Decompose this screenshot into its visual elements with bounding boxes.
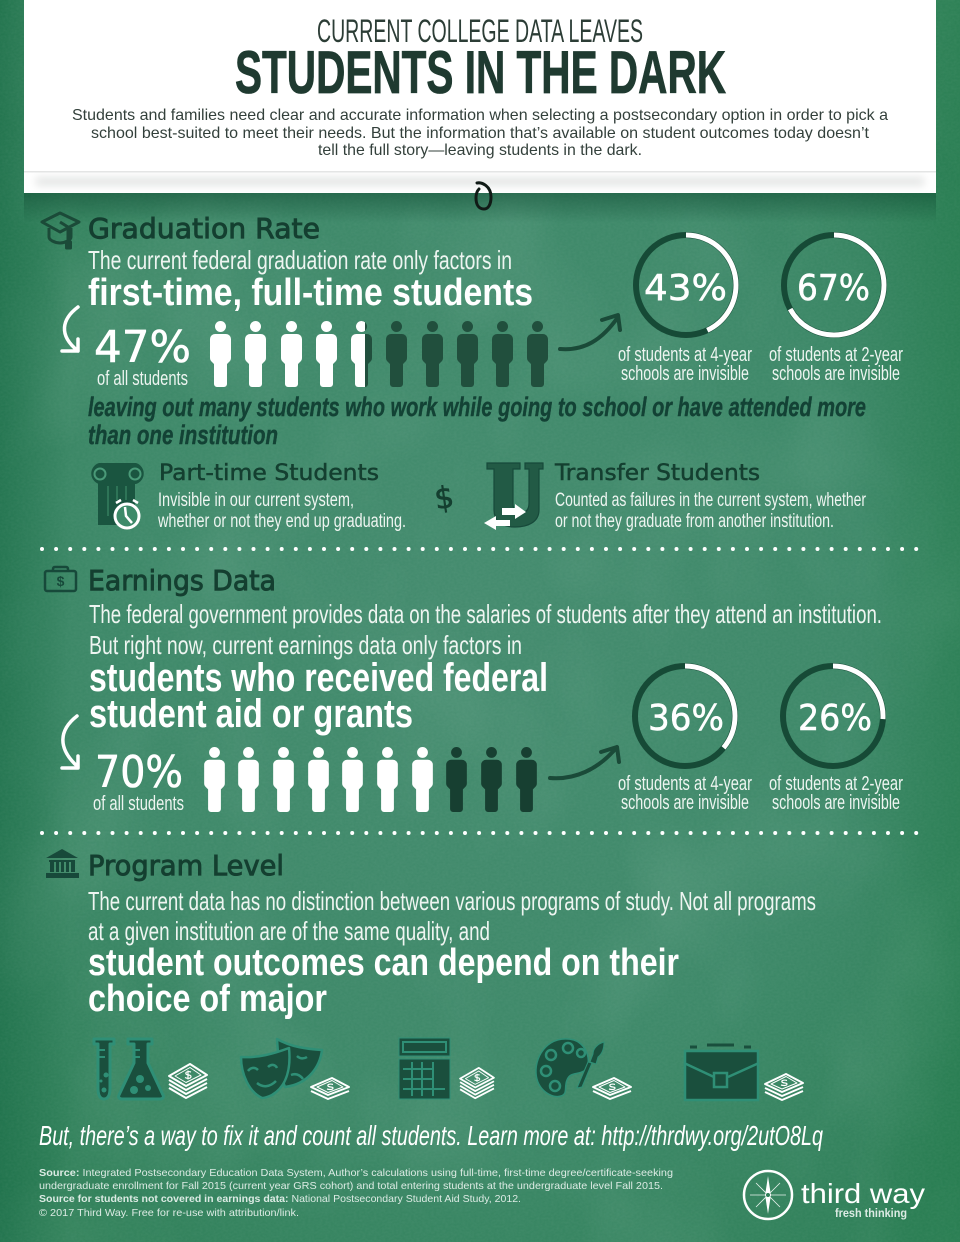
intro text: tell the full story—leaving students in the dark. (318, 142, 642, 159)
emphasis: federal aid students: student aid or grants (89, 692, 413, 736)
intro text: Students and families need clear and accurate information when selecting a postsecondary option in order to pick a (72, 107, 888, 124)
icon: dollar scribble: $ (432, 480, 456, 517)
icon: money stack (593, 1078, 631, 1099)
caption: 2-year: schools are invisible (772, 792, 900, 814)
icon: money stack (169, 1064, 207, 1098)
icon: letter U with arrows (484, 463, 543, 530)
ring: 26 percent (783, 666, 883, 766)
section: program level (46, 849, 816, 1100)
ring: 36 percent (635, 666, 735, 766)
caption: 2-year (769, 773, 903, 814)
label: of all students: of all students (93, 793, 184, 815)
caption: 2-year (769, 344, 903, 385)
ring: 26 percent: 26% (798, 698, 872, 739)
pictogram: 47 percent of students (210, 321, 548, 387)
emphasis: outcomes depend on major: student outcomes can depend on their (88, 942, 679, 984)
icon: money stack (765, 1074, 803, 1100)
heading: part-time students: Part-time Students (159, 461, 379, 486)
caption: 4-year: schools are invisible (621, 363, 749, 385)
pictogram: 70 percent of students (204, 747, 537, 812)
stat: 70 percent: 70% (95, 747, 183, 798)
heading: earnings data: Earnings Data (88, 564, 276, 597)
icon: calculator (399, 1038, 450, 1099)
header panel (24, 0, 936, 193)
icon: cash case (45, 567, 76, 591)
source notes: Source: Integrated Postsecondary Education Data System, Author’s calculations using full-time, first-time degree/certificate-seeking (39, 1167, 673, 1179)
heading: program level: Program Level (88, 849, 284, 882)
text: part-time description: whether or not they end up graduating. (157, 511, 406, 532)
icon: art palette (536, 1039, 604, 1097)
caption: 4-year (618, 773, 752, 814)
emphasis: first-time, full-time students: first-time, full-time students (88, 272, 533, 314)
icon: flask (119, 1039, 163, 1099)
caption: 2-year: of students at 2-year (769, 344, 903, 366)
section: graduation rate (42, 212, 903, 532)
lead text: at a given institution are of the same quality, and (88, 916, 490, 946)
source notes: undergraduate enrollment for Fall 2015 (current year GRS cohort) and total entering students at the undergraduate level Fall 2015. (39, 1180, 663, 1192)
heading: transfer students: Transfer Students (554, 461, 760, 486)
source notes (39, 1167, 673, 1219)
dark italic statement: than one institution (88, 420, 278, 450)
icon: column with clock (91, 463, 144, 528)
caption: 2-year: schools are invisible (772, 363, 900, 385)
emphasis: outcomes depend on major (88, 942, 679, 1020)
emphasis: federal aid students: students who received federal (89, 656, 548, 700)
emphasis: federal aid students (89, 656, 548, 736)
lead text (89, 599, 882, 660)
icon: test tube (94, 1039, 114, 1099)
ring: 67 percent: 67% (797, 268, 870, 309)
logo compass (744, 1171, 792, 1219)
emphasis: outcomes depend on major: choice of major (88, 978, 327, 1020)
icon: money stack (311, 1078, 349, 1099)
icon: institution building (46, 849, 79, 878)
icon: briefcase (684, 1045, 759, 1100)
source notes: © 2017 Third Way. Free for re-use with attribution/link. (39, 1207, 299, 1219)
dark italic statement (88, 392, 866, 450)
icon: theatre masks (241, 1039, 322, 1098)
lead text: But right now, current earnings data only factors in (89, 630, 522, 660)
intro text (72, 107, 888, 159)
heading: graduation rate: Graduation Rate (88, 212, 320, 245)
ring: 43 percent: 43% (644, 268, 727, 309)
text: transfer description: or not they graduate from another institution. (555, 511, 834, 532)
caption: 4-year: schools are invisible (621, 792, 749, 814)
caption: 4-year (618, 344, 752, 385)
caption: 4-year: of students at 4-year (618, 344, 752, 366)
logo: third way (744, 1171, 925, 1220)
text: part-time description: Invisible in our current system, (158, 490, 354, 511)
logo: third way: fresh thinking (835, 1206, 907, 1220)
caption: 4-year: of students at 4-year (618, 773, 752, 795)
arrow: curved down (62, 716, 78, 768)
label: of all students: of all students (97, 368, 188, 390)
icon: money stack (460, 1068, 494, 1098)
lead text: The current federal graduation rate only factors in (88, 245, 512, 275)
section: earnings data (45, 564, 903, 815)
arrow: curved down (62, 307, 78, 351)
ring: 36 percent: 36% (648, 698, 724, 739)
binder ring (476, 183, 491, 209)
caption: 2-year: of students at 2-year (769, 773, 903, 795)
intro text: school best-suited to meet their needs. But the information that’s available on student outcomes today doesn’t (91, 125, 870, 142)
text: transfer description (555, 490, 866, 532)
icon: graduation cap (42, 213, 79, 248)
lead text (88, 886, 816, 946)
icon: cash case: $ (57, 573, 65, 589)
ring: 67 percent (784, 235, 884, 335)
arrow: to rings (550, 747, 619, 778)
text: part-time description (157, 490, 406, 532)
title line one: CURRENT COLLEGE DATA LEAVES (317, 13, 643, 49)
stat: 47 percent: 47% (94, 322, 191, 373)
logo: third way: third way (801, 1178, 925, 1209)
arrow: to rings (560, 315, 620, 349)
ring: 43 percent (636, 235, 736, 335)
title line two: STUDENTS IN THE DARK (235, 39, 726, 106)
source notes: Source for students not covered in earnings data: National Postsecondary Student Aid Study, 2012. (39, 1193, 521, 1205)
